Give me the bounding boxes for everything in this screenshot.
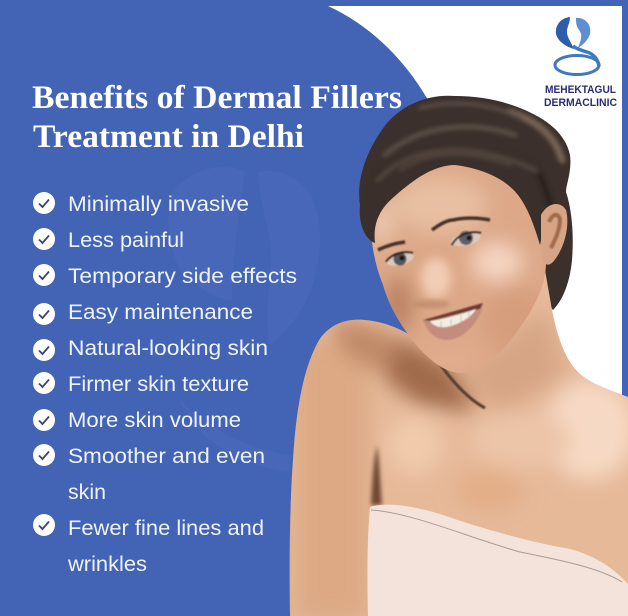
face xyxy=(372,165,546,373)
dress xyxy=(367,505,628,616)
item: smoother and even skin: skin xyxy=(68,481,106,504)
nose xyxy=(421,258,451,298)
item: fewer fine lines and wrinkles xyxy=(33,514,264,576)
item: natural-looking skin: Natural-looking skin xyxy=(68,337,268,360)
logo wordmark: DERMACLINIC xyxy=(544,97,617,109)
title xyxy=(32,80,402,155)
logo wordmark xyxy=(544,84,617,109)
white corner panel xyxy=(328,6,622,400)
hair back xyxy=(359,96,573,310)
item: more skin volume: More skin volume xyxy=(68,409,241,432)
logo xyxy=(544,17,617,109)
item: less painful: Less painful xyxy=(68,229,184,252)
logo wordmark: MEHEKTAGUL xyxy=(545,84,616,96)
title: Benefits of Dermal Fillers xyxy=(32,80,402,116)
title: Treatment in Delhi xyxy=(33,119,304,155)
item: smoother and even skin: Smoother and even xyxy=(68,445,265,468)
item: firmer skin texture: Firmer skin texture xyxy=(68,373,249,396)
item: fewer fine lines and wrinkles: Fewer fine lines and xyxy=(68,517,264,540)
eyes and brows xyxy=(378,218,490,268)
benefits list xyxy=(33,192,297,576)
mouth xyxy=(423,303,483,340)
woman photo illustration xyxy=(280,96,628,616)
logo mark xyxy=(555,17,599,74)
item: easy maintenance: Easy maintenance xyxy=(68,301,253,324)
item: minimally invasive: Minimally invasive xyxy=(68,193,249,216)
body skin xyxy=(280,260,628,616)
faint silhouette watermark xyxy=(168,167,320,472)
item: fewer fine lines and wrinkles: wrinkles xyxy=(67,553,147,576)
hair highlights xyxy=(378,103,562,240)
item: smoother and even skin xyxy=(33,444,265,504)
ear xyxy=(541,204,567,265)
item: temporary side effects: Temporary side effects xyxy=(68,265,297,288)
hair front xyxy=(360,130,550,245)
